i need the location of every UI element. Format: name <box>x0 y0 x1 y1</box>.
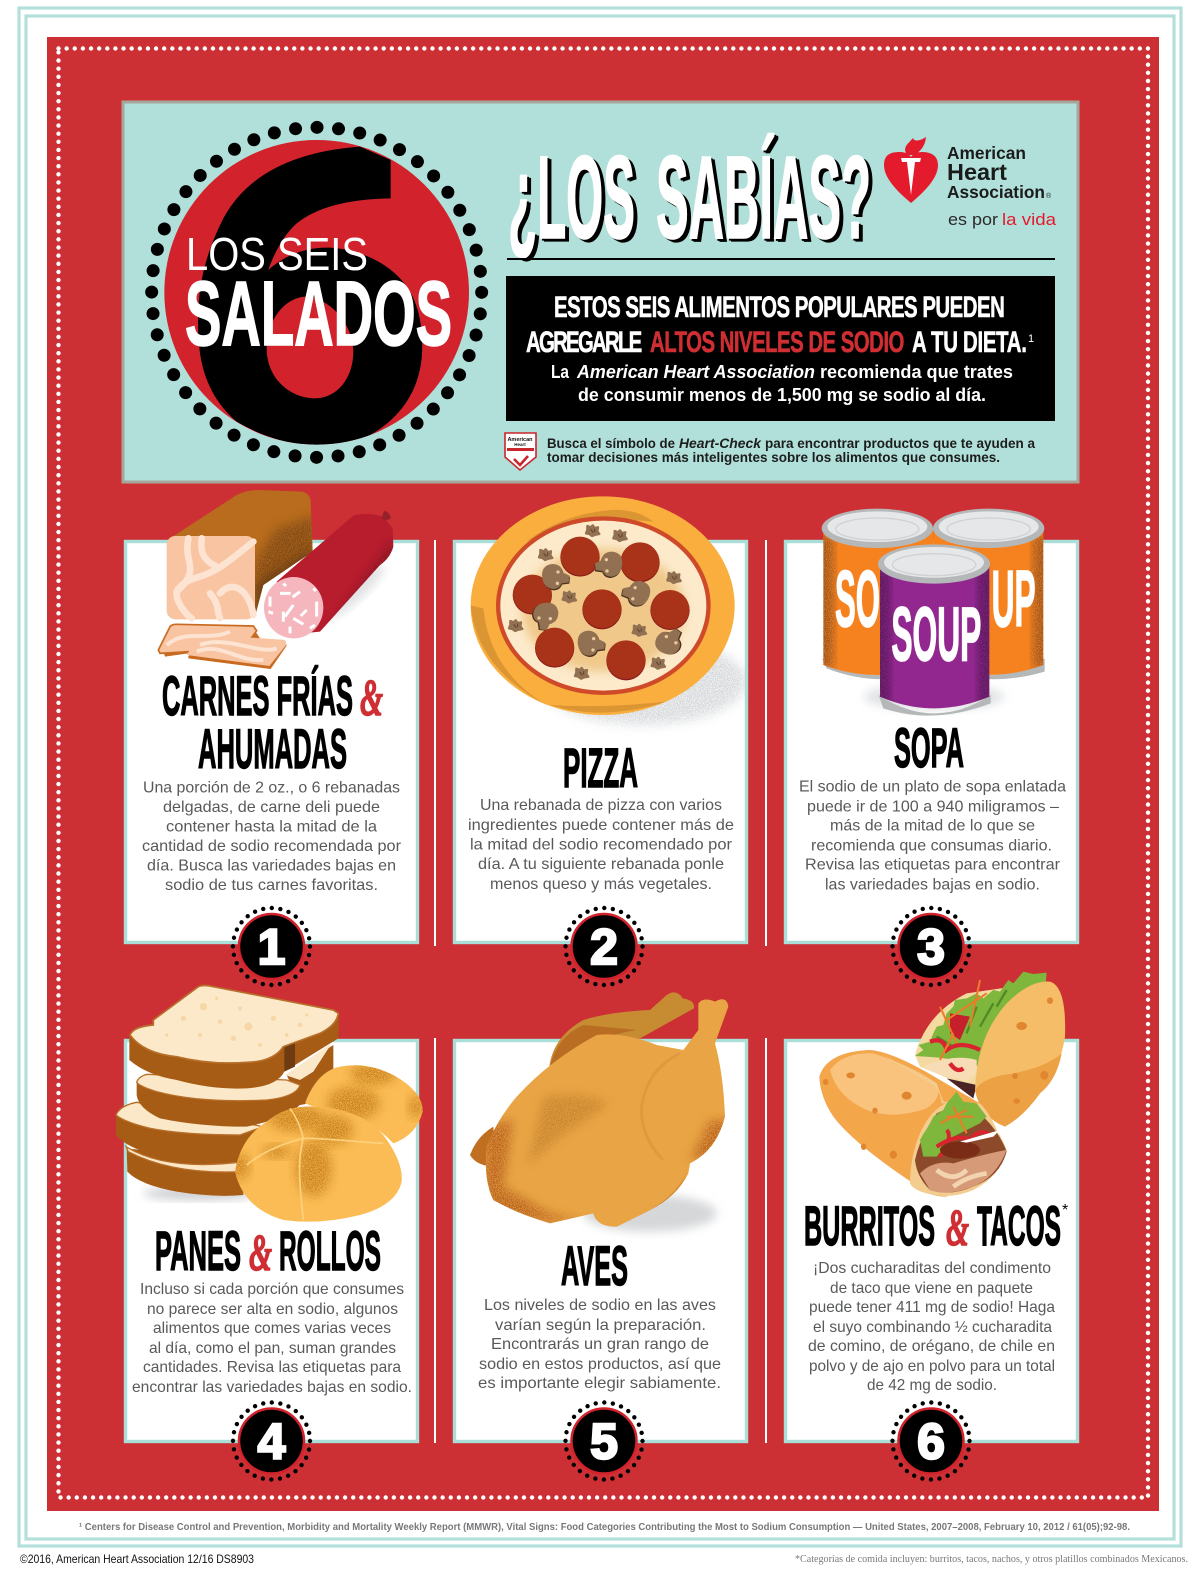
logo: american heart association: ® <box>1046 192 1052 200</box>
text: heart-check note: para encontrar productos que te ayuden a <box>765 436 1035 451</box>
title: los sabias: ¿LOS <box>508 132 635 264</box>
heading: carnes frias y ahumadas <box>162 664 383 780</box>
card 2 text <box>468 736 734 893</box>
body: carnes: cantidad de sodio recomendada por <box>142 838 402 855</box>
heading: burritos y tacos: & <box>946 1200 969 1257</box>
card 5 text <box>478 1234 721 1392</box>
badge: number 3 <box>892 908 970 985</box>
body: carnes <box>142 780 402 894</box>
logo: american heart association: es por <box>948 210 998 229</box>
body: pizza: la mitad del sodio recomendado por <box>470 836 733 854</box>
badge: number 5 <box>566 1402 642 1480</box>
can: right orange <box>933 509 1050 679</box>
callout: sodium message: AGREGARLE <box>526 326 642 359</box>
illustration: burrito and taco <box>819 972 1065 1197</box>
emblem: los seis salados <box>152 127 482 457</box>
card 4 text: ROLLOS <box>279 1219 381 1282</box>
heading: burritos y tacos: BURRITOS <box>804 1194 935 1257</box>
can: left orange: SO <box>835 554 880 643</box>
panel: card 2 background <box>454 542 746 942</box>
body: pizza: menos queso y más vegetales. <box>490 876 712 893</box>
callout: sodium message: La <box>551 362 570 382</box>
emblem: los seis salados: SALADOS <box>185 263 452 365</box>
text: heart-check note <box>547 436 1035 465</box>
body: aves: sodio en estos productos, así que <box>479 1356 721 1373</box>
card 2 text: PIZZA <box>563 736 638 799</box>
body: burritos <box>808 1260 1055 1394</box>
burrito <box>819 1050 1007 1197</box>
body: aves: Los niveles de sodio en las aves <box>484 1297 716 1314</box>
body: burritos: de taco que viene en paquete <box>830 1280 1033 1297</box>
badge: number 1 <box>233 908 310 985</box>
illustration: deli meats <box>158 490 400 669</box>
body: burritos: puede tener 411 mg de sodio! Haga <box>809 1299 1055 1316</box>
body: aves <box>478 1297 721 1392</box>
callout: sodium message: American Heart Association <box>576 362 815 382</box>
body: burritos: de 42 mg de sodio. <box>867 1377 997 1394</box>
illustration: bread and rolls <box>116 985 425 1222</box>
logo: american heart association: Heart <box>947 159 1007 185</box>
callout: sodium message: ESTOS SEIS ALIMENTOS POPULARES PUEDEN <box>554 291 1005 324</box>
illustration: roast chicken <box>470 992 733 1232</box>
body: burritos: el suyo combinando ½ cucharadita <box>813 1319 1052 1336</box>
body: sopa: El sodio de un plato de sopa enlatada <box>799 778 1066 796</box>
body: panes: alimentos que comes varias veces <box>153 1320 391 1337</box>
body: panes: encontrar las variedades bajas en sodio. <box>132 1379 412 1396</box>
badge: number 4: 4 <box>258 1414 286 1470</box>
heading: panes y rollos: & <box>249 1225 272 1282</box>
body: burritos: polvo y de ajo en polvo para un total <box>809 1358 1055 1375</box>
body: burritos: de comino, de orégano, de chile en <box>808 1338 1055 1355</box>
copyright: ©2016, American Heart Association 12/16 DS8903 <box>20 1552 254 1566</box>
can: left orange <box>813 509 933 679</box>
can: right orange: UP <box>992 554 1036 643</box>
body: pizza: día. A tu siguiente rebanada ponle <box>478 856 724 873</box>
body: carnes: contener hasta la mitad de la <box>166 818 377 836</box>
badge: number 4 <box>233 1402 310 1480</box>
badge: number 5: 5 <box>590 1414 618 1470</box>
body: sopa: más de la mitad de lo que se <box>830 818 1035 834</box>
card 4 text <box>132 1219 412 1396</box>
body: carnes: Una porción de 2 oz., o 6 rebanadas <box>143 780 400 796</box>
badge: number 3: 3 <box>917 919 945 975</box>
body: aves: Encontrarás un gran rango de <box>491 1336 709 1353</box>
badge: number 2: 2 <box>590 919 618 975</box>
logo: american heart association <box>884 137 1057 229</box>
card 5 text: AVES <box>561 1234 628 1297</box>
body: sopa: Revisa las etiquetas para encontrar <box>805 856 1061 874</box>
callout: sodium message: de consumir menos de 1,500 mg se sodio al día. <box>578 385 986 405</box>
panel: header <box>123 102 1078 482</box>
body: sopa: puede ir de 100 a 940 miligramos – <box>807 798 1059 816</box>
panel: header: SABÍAS? <box>656 132 871 264</box>
logo: american heart association: American <box>947 143 1026 163</box>
infographic canvas: TACOS <box>977 1194 1061 1257</box>
panel: header: SABÍAS? <box>660 135 875 267</box>
heading: carnes frias y ahumadas: CARNES FRÍAS <box>162 664 353 727</box>
body: panes: al día, como el pan, suman grandes <box>149 1340 396 1357</box>
body: carnes: día. Busca las variedades bajas en <box>147 858 396 874</box>
body: burritos: ¡Dos cucharaditas del condimento <box>813 1260 1051 1277</box>
card 6 text <box>804 1194 1068 1394</box>
body: panes: cantidades. Revisa las etiquetas para <box>143 1359 401 1376</box>
taco <box>915 972 1065 1127</box>
card 3 text <box>799 716 1066 894</box>
text: heart-check note: Busca el símbolo de <box>547 436 675 451</box>
body: sopa <box>799 778 1066 894</box>
heading: carnes frias y ahumadas: AHUMADAS <box>198 717 347 780</box>
body: sopa: las variedades bajas en sodio. <box>825 876 1040 894</box>
panel: card 1 background <box>126 542 418 942</box>
body: pizza <box>468 797 734 893</box>
can: front purple <box>873 544 995 716</box>
heading: burritos y tacos: * <box>1062 1202 1068 1219</box>
illustration: soup cans: SOUP <box>891 593 981 678</box>
panel: header: SABÍAS? <box>658 134 873 266</box>
panel: card 4 background <box>126 1040 418 1442</box>
panel: card 6 background <box>786 1040 1078 1442</box>
body: carnes: delgadas, de carne deli puede <box>163 799 380 816</box>
text: heart-check note: Heart-Check <box>679 436 763 451</box>
body: aves: varían según la preparación. <box>495 1317 706 1334</box>
body: carnes: sodio de tus carnes favoritas. <box>165 877 378 894</box>
panel: card 3 background <box>786 542 1078 942</box>
callout: sodium message <box>506 276 1055 421</box>
illustration: pizza <box>471 496 747 725</box>
badge: number 2 <box>566 908 642 985</box>
body: panes: Incluso si cada porción que consumes <box>140 1281 404 1298</box>
body: sopa: recomienda que consumas diario. <box>811 838 1052 854</box>
emblem: los seis salados: LOS SEIS <box>186 228 368 280</box>
badge: number 6: 6 <box>917 1414 945 1470</box>
body: pizza: Una rebanada de pizza con varios <box>480 797 722 814</box>
badge: number 6 <box>892 1402 970 1480</box>
logo: american heart association: Association <box>947 182 1045 202</box>
body: pizza: ingredientes puede contener más de <box>468 817 734 834</box>
callout: sodium message: recomienda que trates <box>820 362 1013 382</box>
logo: american heart association: la vida <box>1002 210 1057 229</box>
callout: sodium message: 1 <box>1028 333 1034 345</box>
card 3 text: SOPA <box>894 716 964 779</box>
title: los sabias: ¿LOS <box>512 135 639 267</box>
title: los sabias: ¿LOS <box>510 134 637 266</box>
body: panes: no parece ser alta en sodio, algunos <box>147 1301 398 1318</box>
icon: heart-check shield: American <box>507 437 533 443</box>
panel: card 5 background <box>454 1040 746 1442</box>
body: panes <box>132 1281 412 1396</box>
heading: carnes frias y ahumadas: & <box>360 670 383 727</box>
card 1 text <box>142 664 402 894</box>
icon: heart-check shield: Heart <box>514 442 526 447</box>
callout: sodium message: A TU DIETA. <box>912 326 1027 359</box>
badge: number 1: 1 <box>258 919 285 975</box>
text: heart-check note: tomar decisiones más inteligentes sobre los alimentos que consumes. <box>547 450 1000 465</box>
heading: panes y rollos: PANES <box>155 1219 241 1282</box>
callout: sodium message: ALTOS NIVELES DE SODIO <box>650 326 904 359</box>
icon: heart-check shield <box>505 433 536 470</box>
body: aves: es importante elegir sabiamente. <box>478 1375 721 1392</box>
illustration: soup cans <box>813 509 1050 716</box>
